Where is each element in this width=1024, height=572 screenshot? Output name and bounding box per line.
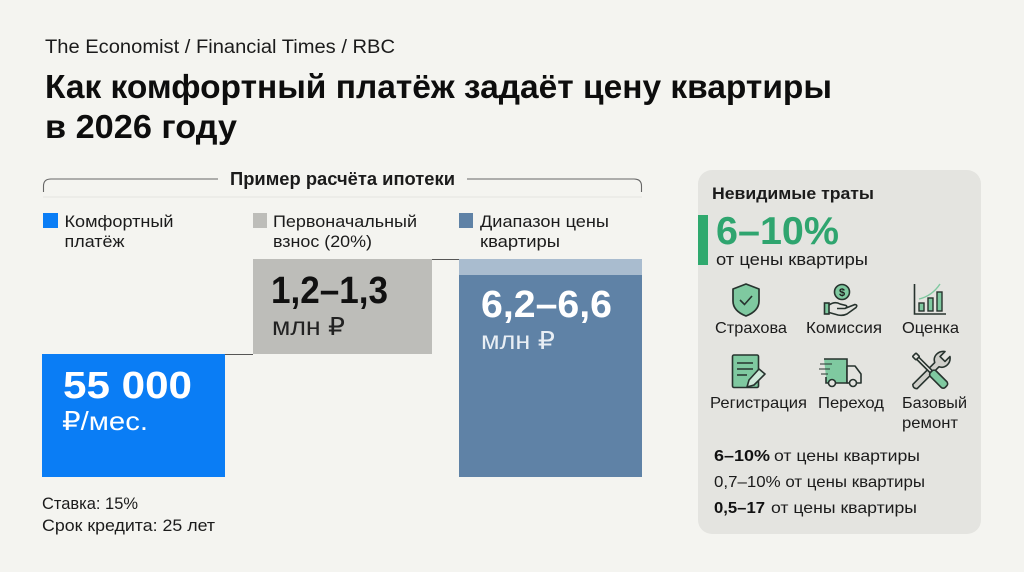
bar: apartment price range <box>459 259 642 477</box>
label: commission: Комиссия <box>806 320 882 337</box>
section heading: mortgage example <box>43 169 642 197</box>
key figure: от цены квартиры <box>716 250 868 269</box>
bar: apartment price range: 6,2–6,6 <box>481 284 612 326</box>
loan terms note: Срок кредита: 25 лет <box>42 517 215 535</box>
icon: appraisal chart <box>914 284 946 314</box>
bar: comfortable payment: 55 000 <box>63 365 192 407</box>
icon: repair tools <box>909 349 953 393</box>
label: registration: Регистрация <box>710 395 807 412</box>
legend: comfortable payment <box>43 212 174 251</box>
connector lines between bars <box>225 260 459 354</box>
bar: apartment price range: млн ₽ <box>481 327 555 355</box>
icon: moving truck <box>819 359 861 386</box>
section heading: mortgage example: Пример расчёта ипотеки <box>230 169 455 189</box>
bar: comfortable payment: ₽/мес. <box>62 406 148 436</box>
source line: The Economist / Financial Times / RBC <box>45 37 395 58</box>
legend: price range: Диапазон цены <box>480 212 609 231</box>
bar: down payment <box>253 259 432 354</box>
legend: comfortable payment: Комфортный <box>64 212 174 231</box>
legend: comfortable payment: платёж <box>64 232 125 251</box>
icon: commission: $ <box>839 287 845 299</box>
loan terms note: Ставка: 15% <box>42 495 138 513</box>
key figure <box>698 210 868 269</box>
panel heading: Невидимые траты <box>712 184 874 203</box>
summary list: 0,7–10% от цены квартиры <box>714 474 925 491</box>
label: basic repair: ремонт <box>902 415 959 432</box>
summary list: от цены квартиры <box>774 448 920 465</box>
summary list <box>714 448 925 517</box>
legend: down payment: взнос (20%) <box>273 232 372 251</box>
label: moving: Переход <box>818 395 885 412</box>
bar: down payment: 1,2–1,3 <box>271 270 388 312</box>
icon: commission <box>824 284 857 315</box>
legend: price range: квартиры <box>480 232 560 251</box>
bar: down payment: млн ₽ <box>272 313 345 341</box>
legend: price range <box>459 212 609 251</box>
label: basic repair <box>902 395 967 432</box>
panel: hidden costs <box>698 170 981 534</box>
title: в 2026 году <box>45 108 238 145</box>
key figure: 6–10% <box>716 210 839 253</box>
summary list: от цены квартиры <box>771 500 917 517</box>
label: basic repair: Базовый <box>902 395 967 412</box>
icon: insurance shield <box>733 284 759 316</box>
legend: down payment <box>253 212 417 251</box>
label: appraisal: Оценка <box>902 320 959 337</box>
title: Как комфортный платёж задаёт цену квартиры <box>45 68 832 105</box>
label: insurance: Страхова <box>715 320 787 337</box>
bar: comfortable payment <box>42 354 225 477</box>
title <box>45 68 832 145</box>
summary list: 0,5–17 <box>714 500 765 517</box>
summary list: 6–10% <box>714 448 770 465</box>
icon: registration document <box>732 355 765 388</box>
legend: down payment: Первоначальный <box>273 212 417 231</box>
loan terms note <box>42 495 215 535</box>
